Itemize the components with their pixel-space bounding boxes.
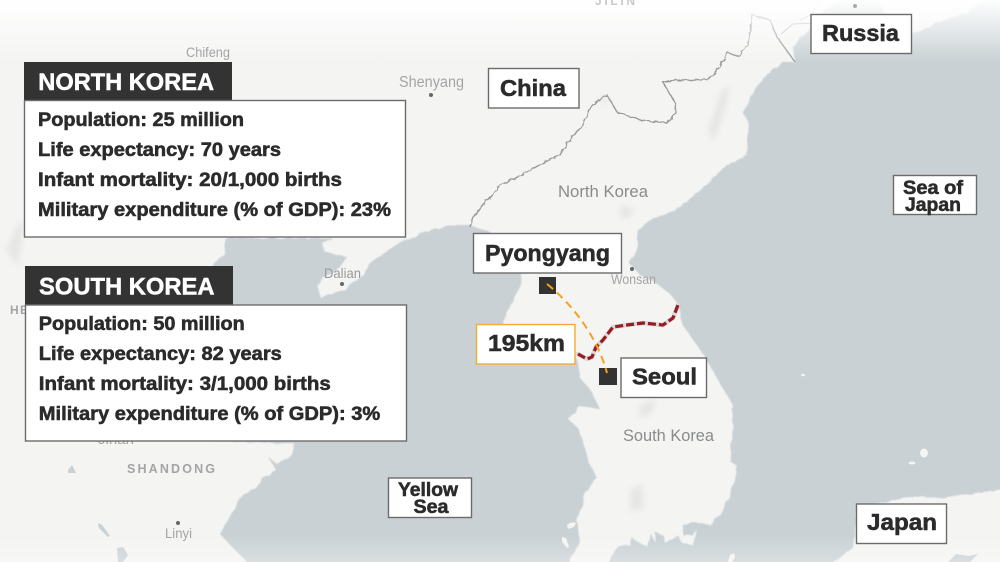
heading: North Korea	[24, 62, 232, 100]
label: Japan: Japan	[867, 509, 937, 535]
place names: HE	[10, 303, 28, 317]
place names: Jinan	[98, 432, 134, 447]
place names: Shenyang	[399, 74, 464, 91]
stats: North Korea: Infant mortality: 20/1,000 births	[38, 170, 342, 191]
label: Yellow Sea: Sea	[414, 497, 449, 518]
place names: North Korea	[558, 182, 649, 201]
place names: Chifeng	[186, 44, 230, 60]
border: Russia and China	[781, 23, 815, 34]
label: China: China	[500, 75, 567, 101]
top fade	[0, 0, 1000, 62]
place names: SHANDONG	[127, 462, 215, 476]
label: Sea of Japan	[894, 176, 976, 216]
label: Pyongyang: Pyongyang	[485, 240, 610, 266]
label: Seoul: Seoul	[632, 364, 697, 390]
label: Yellow Sea: Yellow	[398, 480, 458, 501]
label: Pyongyang	[474, 234, 622, 273]
label: China	[488, 68, 579, 108]
distance line	[547, 284, 607, 373]
inland water	[68, 465, 978, 562]
heading: South Korea	[25, 266, 233, 305]
stats: North Korea: Population: 25 million	[38, 110, 244, 131]
label: Sea of Japan: Sea of	[903, 178, 964, 199]
stats: South Korea: Military expenditure (% of GDP): 3%	[39, 404, 380, 425]
place names: South Korea	[623, 426, 715, 445]
panel: North Korea	[24, 62, 406, 237]
place names: Wonsan	[611, 271, 656, 287]
label: Japan	[856, 504, 946, 544]
stats: South Korea	[26, 305, 406, 441]
stats: South Korea: Infant mortality: 3/1,000 births	[39, 374, 331, 395]
stats: North Korea	[24, 100, 406, 237]
sea: Yellow Sea and Bohai	[200, 225, 600, 562]
marker: Seoul	[599, 368, 617, 385]
place names: Dalian	[324, 265, 361, 281]
sea: Sea of Japan	[610, 0, 1000, 562]
islands	[562, 372, 928, 562]
marker: Pyongyang	[539, 277, 556, 294]
stats: South Korea: Population: 50 million	[39, 314, 245, 335]
panel: South Korea	[25, 266, 406, 441]
stats: North Korea: Military expenditure (% of GDP): 23%	[38, 200, 391, 221]
place names: Linyi	[165, 525, 192, 541]
DMZ border line	[578, 305, 678, 359]
bottom fade	[0, 535, 1000, 562]
label: distance 195km: 195km	[488, 330, 565, 356]
stats: North Korea: Life expectancy: 70 years	[38, 140, 281, 161]
label: distance 195km	[476, 324, 575, 364]
terrain shading	[6, 86, 730, 512]
heading: South Korea: SOUTH KOREA	[39, 274, 214, 300]
label: Russia	[811, 14, 912, 54]
label: Seoul	[621, 358, 706, 398]
border: North Korea and China	[470, 15, 795, 227]
stats: South Korea: Life expectancy: 82 years	[39, 344, 282, 365]
label: Sea of Japan: Japan	[905, 195, 961, 216]
label: Yellow Sea	[388, 478, 472, 518]
heading: North Korea: NORTH KOREA	[38, 69, 214, 96]
label: Russia: Russia	[822, 20, 900, 46]
